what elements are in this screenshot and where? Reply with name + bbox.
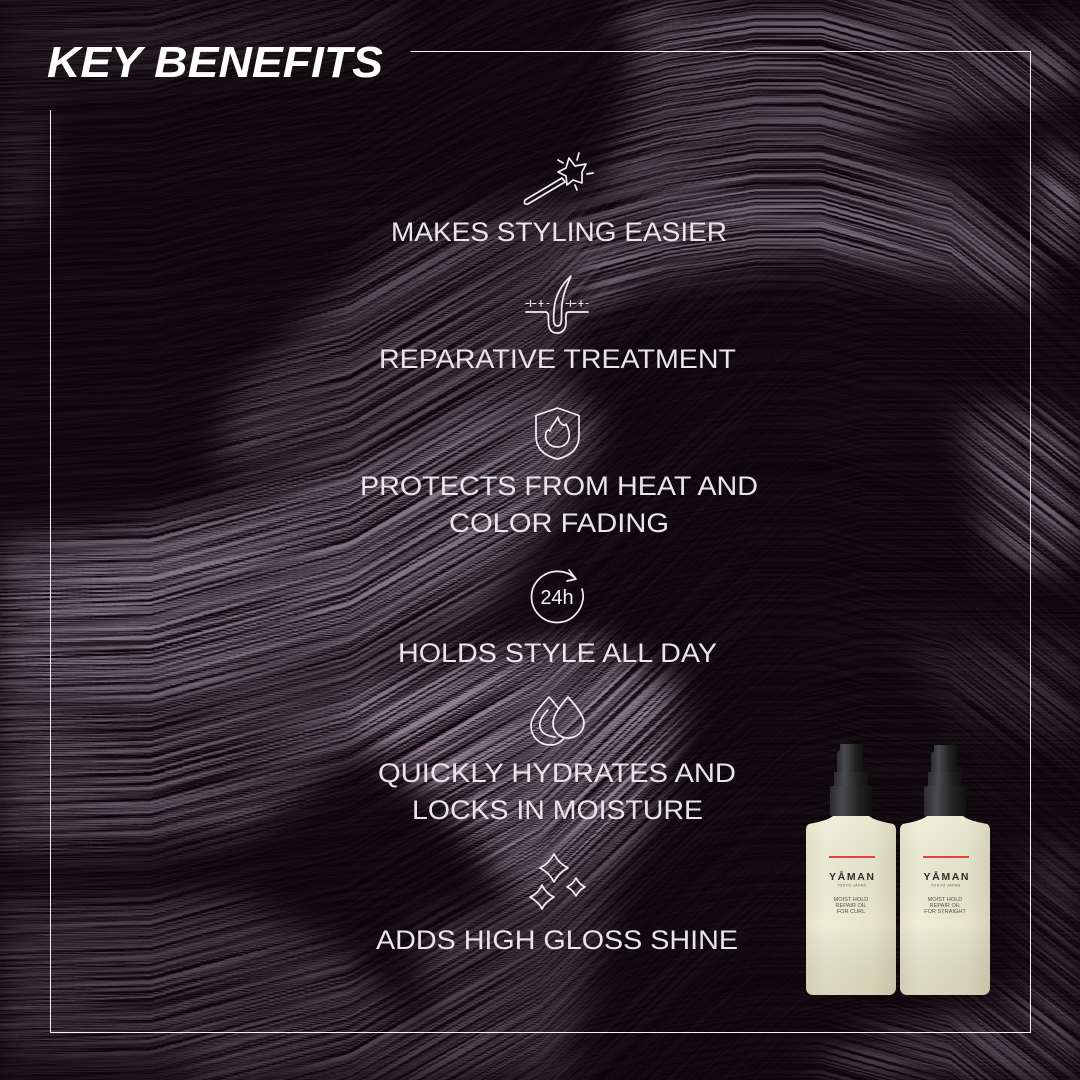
tokyo japan: TOKYO JAPAN <box>837 884 866 888</box>
benefit: protects from heat <box>360 408 758 538</box>
label: COLOR FADING <box>449 508 669 538</box>
icon: water drops <box>531 697 584 745</box>
tokyo japan: TOKYO JAPAN <box>931 884 960 888</box>
icon: sparkles <box>530 854 585 909</box>
label: QUICKLY HYDRATES AND <box>378 758 736 788</box>
icon: shield with flame <box>536 408 579 459</box>
icon: hair follicle <box>526 276 588 333</box>
benefit: hydrates <box>378 697 736 825</box>
red line <box>923 856 969 858</box>
bottle body <box>900 816 990 995</box>
benefit: reparative treatment <box>379 276 736 374</box>
label: ADDS HIGH GLOSS SHINE <box>376 925 738 955</box>
product: bottle for straight <box>900 745 990 995</box>
product name: REPAIR OIL <box>930 903 960 909</box>
product name: FOR CURL <box>837 909 865 915</box>
product name: MOIST HOLD <box>834 897 868 903</box>
benefit: makes styling easier <box>391 153 727 247</box>
bottle body <box>806 816 896 995</box>
label <box>360 471 758 538</box>
bottle shading <box>900 816 990 995</box>
product name: REPAIR OIL <box>836 903 866 909</box>
icon: 24h clock arrow: 24h <box>540 587 574 609</box>
label: MAKES STYLING EASIER <box>391 217 727 247</box>
label: HOLDS STYLE ALL DAY <box>398 638 717 668</box>
label: REPARATIVE TREATMENT <box>379 344 736 374</box>
benefit: gloss shine <box>376 854 738 955</box>
bottle shading <box>806 816 896 995</box>
product: bottle for curl <box>806 744 896 995</box>
product name: MOIST HOLD <box>928 897 962 903</box>
label: PROTECTS FROM HEAT AND <box>360 471 758 501</box>
brand: YĀMAN <box>829 871 874 883</box>
brand: YĀMAN <box>924 871 968 883</box>
bottle pump <box>830 744 872 816</box>
label <box>378 758 736 825</box>
label: LOCKS IN MOISTURE <box>412 795 703 825</box>
product name: FOR STRAIGHT <box>924 909 966 915</box>
red line <box>829 856 875 858</box>
bottle pump <box>924 745 966 816</box>
title: KEY BENEFITS <box>47 38 383 87</box>
icon: magic wand <box>524 153 593 204</box>
icon: 24h clock arrow <box>532 570 583 622</box>
benefit: holds style all day <box>398 570 717 668</box>
